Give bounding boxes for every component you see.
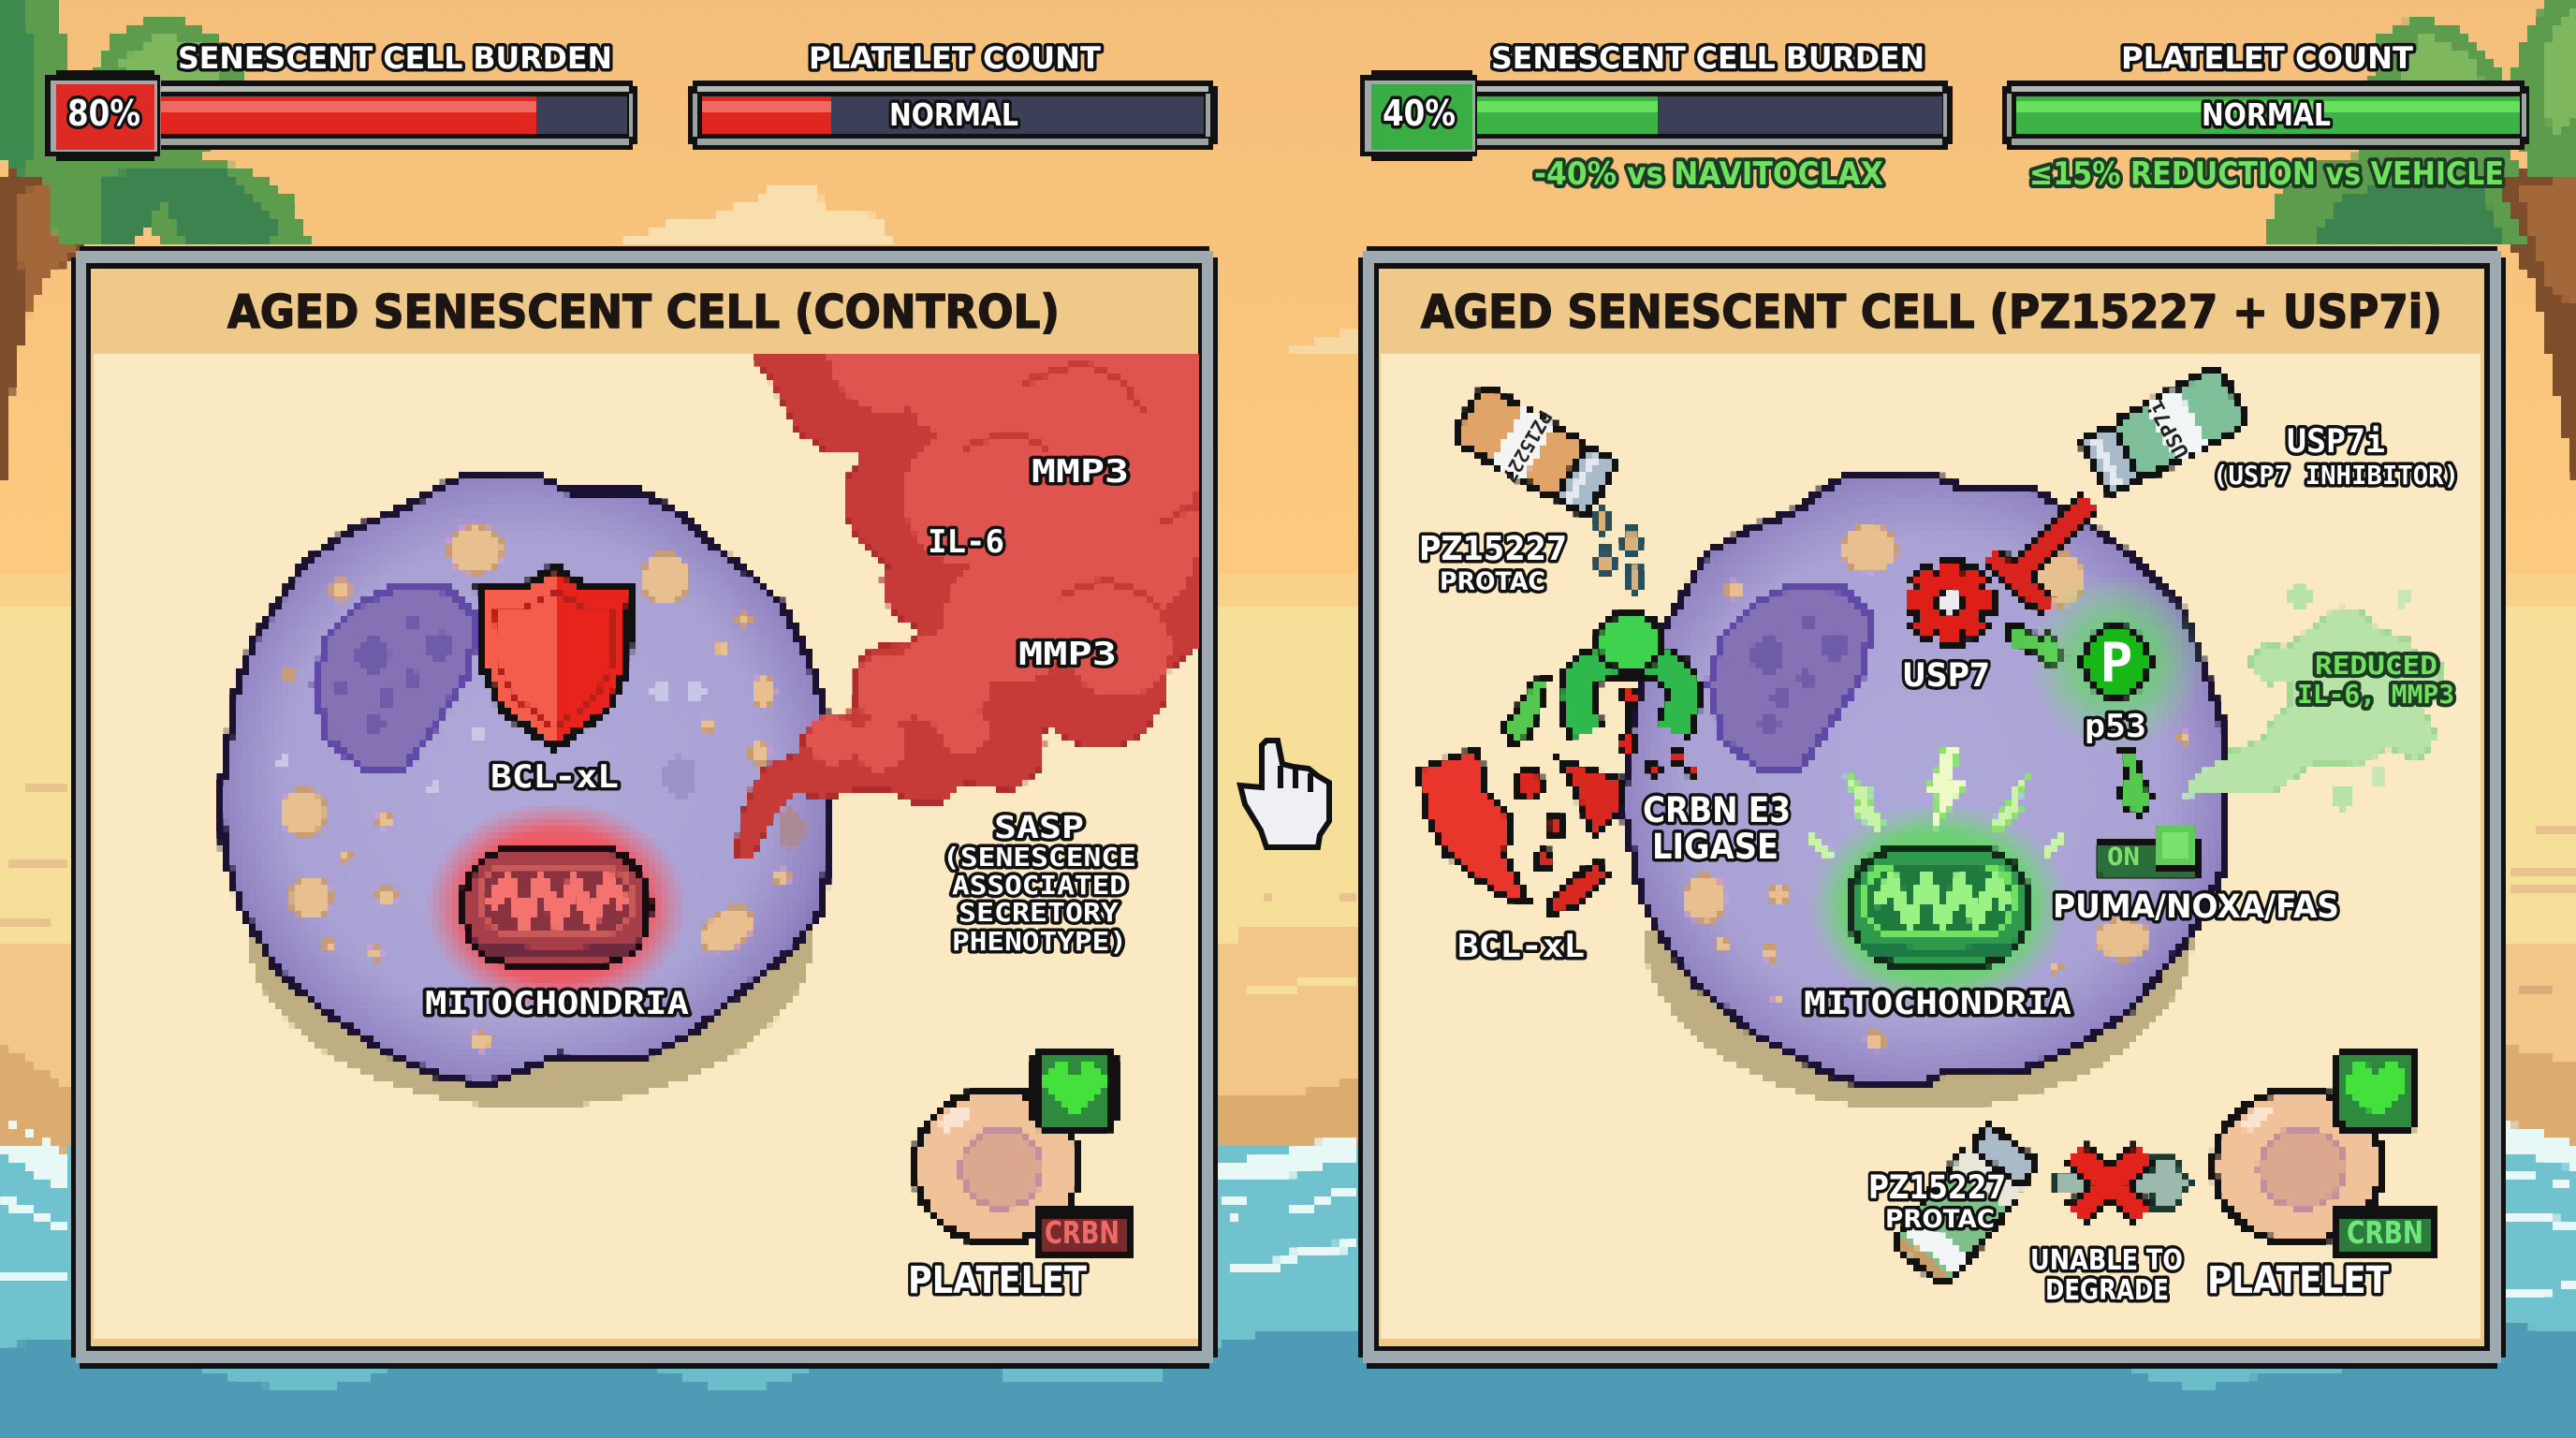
HUD: treatment <box>1360 40 2529 193</box>
SASP cytokine labels <box>928 453 1129 673</box>
label: unable to degrade <box>2030 1244 2183 1307</box>
claw: CRBN E3 ligase <box>1576 613 1683 732</box>
label: BCL-xL: BCL-xL <box>1457 928 1585 965</box>
label: platelet: PLATELET <box>2207 1259 2390 1302</box>
label: CRBN E3 ligase: LIGASE <box>1652 827 1778 867</box>
gauge: platelet count normal (treated) <box>2002 81 2529 150</box>
label: MMP3 lower: MMP3 <box>1018 636 1117 673</box>
label: PUMA/NOXA/FAS: PUMA/NOXA/FAS <box>2053 888 2339 926</box>
vial: PZ15227 blocked <box>1891 1122 2042 1288</box>
heart badge <box>2337 1050 2417 1129</box>
palm tree: right <box>2265 0 2576 487</box>
HUD: control <box>45 40 1218 161</box>
label: BCL-xL: BCL-xL <box>490 758 619 796</box>
label: platelet count (treated): PLATELET COUNT <box>2121 40 2413 76</box>
label: senescent cell burden (control): SENESCENT CELL BURDEN <box>178 40 612 76</box>
label: SASP definition: (SENESCENCE <box>943 842 1136 873</box>
label: P: P <box>2100 631 2132 695</box>
platelet <box>915 1090 1079 1243</box>
label: reduced IL-6, MMP3: IL-6, MMP3 <box>2297 679 2454 710</box>
gauge: senescent burden 80% <box>45 70 637 161</box>
label: CRBN tag: CRBN <box>2347 1214 2423 1251</box>
label: unable to degrade: DEGRADE <box>2045 1274 2169 1307</box>
label: platelet: PLATELET <box>908 1259 1088 1302</box>
label: reduced IL-6, MMP3: REDUCED <box>2315 650 2437 681</box>
mitochondrion: stressed <box>463 848 649 965</box>
note: burden reduction: -40% vs NAVITOCLAX <box>1534 155 1883 193</box>
label: PZ15227 PROTAC: PROTAC <box>1440 567 1545 596</box>
shadow under cell <box>246 928 815 1108</box>
mitochondria glow <box>1808 801 2070 1011</box>
label: CRBN E3 ligase <box>1643 790 1791 867</box>
gauge: senescent burden 40% <box>1360 70 1953 161</box>
cell granules <box>1684 525 2189 1050</box>
label: SASP definition: SECRETORY <box>959 897 1119 928</box>
cloud <box>611 187 895 246</box>
label: mitochondria: MITOCHONDRIA <box>425 985 689 1022</box>
PROTAC droplets <box>1597 509 1641 592</box>
green reduced SASP cloud <box>2181 586 2441 810</box>
label: PZ15227 PROTAC: PZ15227 <box>1419 530 1567 568</box>
icon: red X <box>2075 1153 2144 1215</box>
label: reduced IL-6, MMP3 <box>2297 650 2454 710</box>
value: normal: NORMAL <box>2202 96 2331 133</box>
note: platelet reduction: ≤15% REDUCTION vs VEHICLE <box>2029 155 2504 193</box>
shield icon: BCL-xL <box>477 565 632 750</box>
p53 phospho badge <box>2083 627 2150 697</box>
heart badge <box>1035 1050 1114 1129</box>
label: SASP definition <box>943 809 1136 957</box>
arrow: blocked path <box>2056 1159 2190 1208</box>
CRBN tag background <box>2338 1212 2433 1253</box>
cell granules <box>281 526 805 1050</box>
green cloud stream in cell <box>2181 754 2232 803</box>
switch: ON <box>2097 826 2198 878</box>
nucleus <box>1709 588 1872 772</box>
title: control: AGED SENESCENT CELL (CONTROL) <box>227 286 1060 339</box>
label: unable to degrade: UNABLE TO <box>2030 1244 2183 1277</box>
label: senescent cell burden (treated): SENESCENT CELL BURDEN <box>1491 40 1925 76</box>
nucleus <box>315 588 477 772</box>
p53 glow <box>2027 573 2205 751</box>
CRBN tag background <box>1036 1212 1130 1253</box>
senescent cell body <box>1622 475 2227 1086</box>
label: SASP definition: ASSOCIATED <box>952 870 1127 901</box>
label: platelet count (control): PLATELET COUNT <box>809 40 1101 76</box>
label: ON: ON <box>2107 843 2140 872</box>
vial: USP7i <box>2079 366 2249 497</box>
platelet <box>2214 1090 2382 1243</box>
senescent cell body <box>221 475 829 1085</box>
panel: PZ15227 + USP7i treatment <box>1358 246 2506 1369</box>
value: 40%: 40% <box>1383 93 1456 134</box>
arrow: gear to p53 <box>2006 624 2065 667</box>
icon: pixel hand cursor <box>1240 741 1329 847</box>
value: normal: NORMAL <box>889 96 1018 133</box>
label: p53: p53 <box>2085 708 2146 745</box>
vial: PZ15227 <box>1451 385 1617 517</box>
vial text: USP7i: USP7i <box>2144 396 2194 462</box>
cell speckles <box>278 682 705 798</box>
label: PZ15227 PROTAC blocked: PROTAC <box>1885 1205 1995 1234</box>
panel: control <box>71 246 1250 1369</box>
label: USP7i inhibitor <box>2213 423 2459 491</box>
SASP cloud <box>737 290 1250 860</box>
value: 80%: 80% <box>67 93 140 134</box>
label: USP7i inhibitor: USP7i <box>2287 423 2385 461</box>
energy bolts <box>1807 746 2067 859</box>
label: USP7i inhibitor: (USP7 INHIBITOR) <box>2213 460 2459 491</box>
label: IL-6: IL-6 <box>928 523 1004 561</box>
inhibition marker: red T bar <box>1991 502 2090 607</box>
label: MMP3: MMP3 <box>1032 453 1129 491</box>
arrow: p53 to switch <box>2119 752 2153 816</box>
label: PZ15227 PROTAC blocked: PZ15227 <box>1868 1169 2006 1207</box>
shadow under cell <box>1642 928 2194 1110</box>
gauge: platelet count normal (control) <box>688 81 1218 150</box>
gear icon: USP7 <box>1904 556 1996 648</box>
degraded BCL-xL fragments <box>1418 688 1698 914</box>
panel frame: treatment <box>1358 246 2506 1369</box>
palm tree: left <box>0 0 312 492</box>
label: PZ15227 PROTAC <box>1419 530 1567 596</box>
arrow: claw to fragments <box>1503 678 1548 744</box>
label: SASP definition: PHENOTYPE) <box>952 926 1127 957</box>
label: CRBN tag: CRBN <box>1045 1214 1120 1251</box>
vial text: PZ15227: PZ15227 <box>1498 406 1557 486</box>
label: mitochondria: MITOCHONDRIA <box>1804 985 2071 1022</box>
label: CRBN E3 ligase: CRBN E3 <box>1643 790 1791 830</box>
illustration: treatment art <box>1418 366 2441 1288</box>
illustration: control art <box>216 354 1199 1258</box>
title: treatment: AGED SENESCENT CELL (PZ15227 + USP7i) <box>1421 286 2442 339</box>
mitochondrion: activated <box>1850 848 2028 965</box>
label: USP7: USP7 <box>1902 657 1990 695</box>
mitochondria glow <box>425 801 687 1011</box>
panel frame: control <box>71 246 1218 1369</box>
label: SASP definition: SASP <box>994 809 1084 845</box>
label: PZ15227 PROTAC blocked <box>1868 1169 2006 1234</box>
